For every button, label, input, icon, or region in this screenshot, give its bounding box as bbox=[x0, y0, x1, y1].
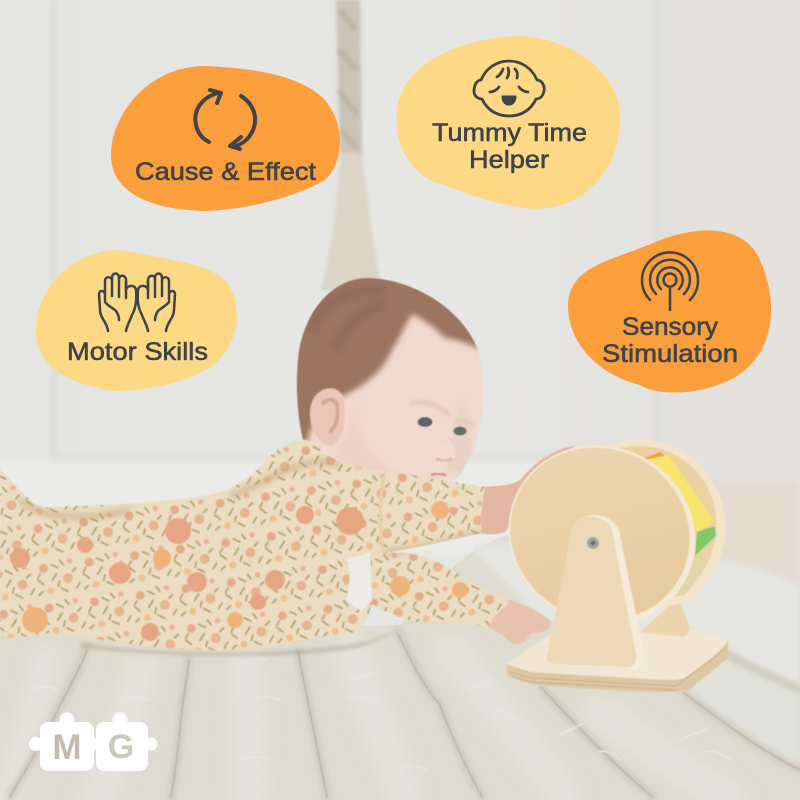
logo: MG puzzle pieces: G bbox=[108, 728, 134, 766]
shadow under baby bbox=[80, 630, 400, 656]
upper hand on toy bbox=[479, 446, 575, 534]
front disc bbox=[477, 413, 727, 657]
front stand with bolt bbox=[547, 515, 644, 669]
eyes bbox=[410, 402, 474, 436]
badge: Tummy Time Helper bbox=[397, 36, 620, 209]
icon: cycle arrows bbox=[195, 90, 255, 149]
rear stand bbox=[640, 598, 690, 637]
badge: Motor Skills bbox=[36, 250, 237, 391]
wall hanging: rope and tassel bbox=[320, 0, 381, 292]
label: Tummy Time bbox=[432, 119, 587, 147]
badge: Sensory Stimulation bbox=[568, 230, 771, 393]
baby: hands bbox=[479, 446, 575, 645]
badge: Sensory Stimulation: Stimulation bbox=[602, 340, 738, 368]
icon: open hands bbox=[99, 274, 175, 331]
badge: Tummy Time Helper: Helper bbox=[469, 146, 549, 174]
baby: floral sleepsuit bbox=[0, 440, 510, 651]
quilt seam shading bbox=[10, 630, 800, 797]
quilt seam lines bbox=[10, 634, 800, 797]
colour blocks bbox=[645, 452, 716, 556]
icon: smiling baby face bbox=[474, 61, 544, 116]
ear bbox=[310, 388, 345, 446]
nose bbox=[432, 442, 456, 462]
fluffy far mat area bbox=[470, 541, 800, 690]
darker cloth folds bbox=[20, 462, 482, 553]
label: Sensory bbox=[622, 313, 719, 341]
lower hand on mat bbox=[485, 600, 551, 645]
tuck marks on quilt bbox=[30, 659, 730, 770]
logo: MG puzzle pieces bbox=[29, 712, 158, 771]
rear disc bbox=[606, 439, 726, 610]
logo: MG puzzle pieces: M bbox=[52, 728, 82, 767]
face bbox=[307, 315, 483, 482]
icon: broadcast signal bbox=[642, 252, 698, 310]
badge: Cause & Effect bbox=[111, 66, 340, 211]
label: Cause & Effect bbox=[135, 158, 316, 186]
hair bbox=[296, 277, 478, 442]
baby: head bbox=[296, 278, 483, 482]
label: Motor Skills bbox=[67, 338, 208, 366]
quilted play mat bbox=[0, 534, 800, 800]
soft highlights along quilt rolls bbox=[5, 650, 730, 800]
mouth bbox=[431, 474, 446, 476]
toy base bbox=[506, 626, 728, 692]
mat surface bbox=[0, 534, 800, 800]
plywood layers bbox=[510, 648, 726, 690]
wooden spinning toy bbox=[477, 413, 728, 692]
